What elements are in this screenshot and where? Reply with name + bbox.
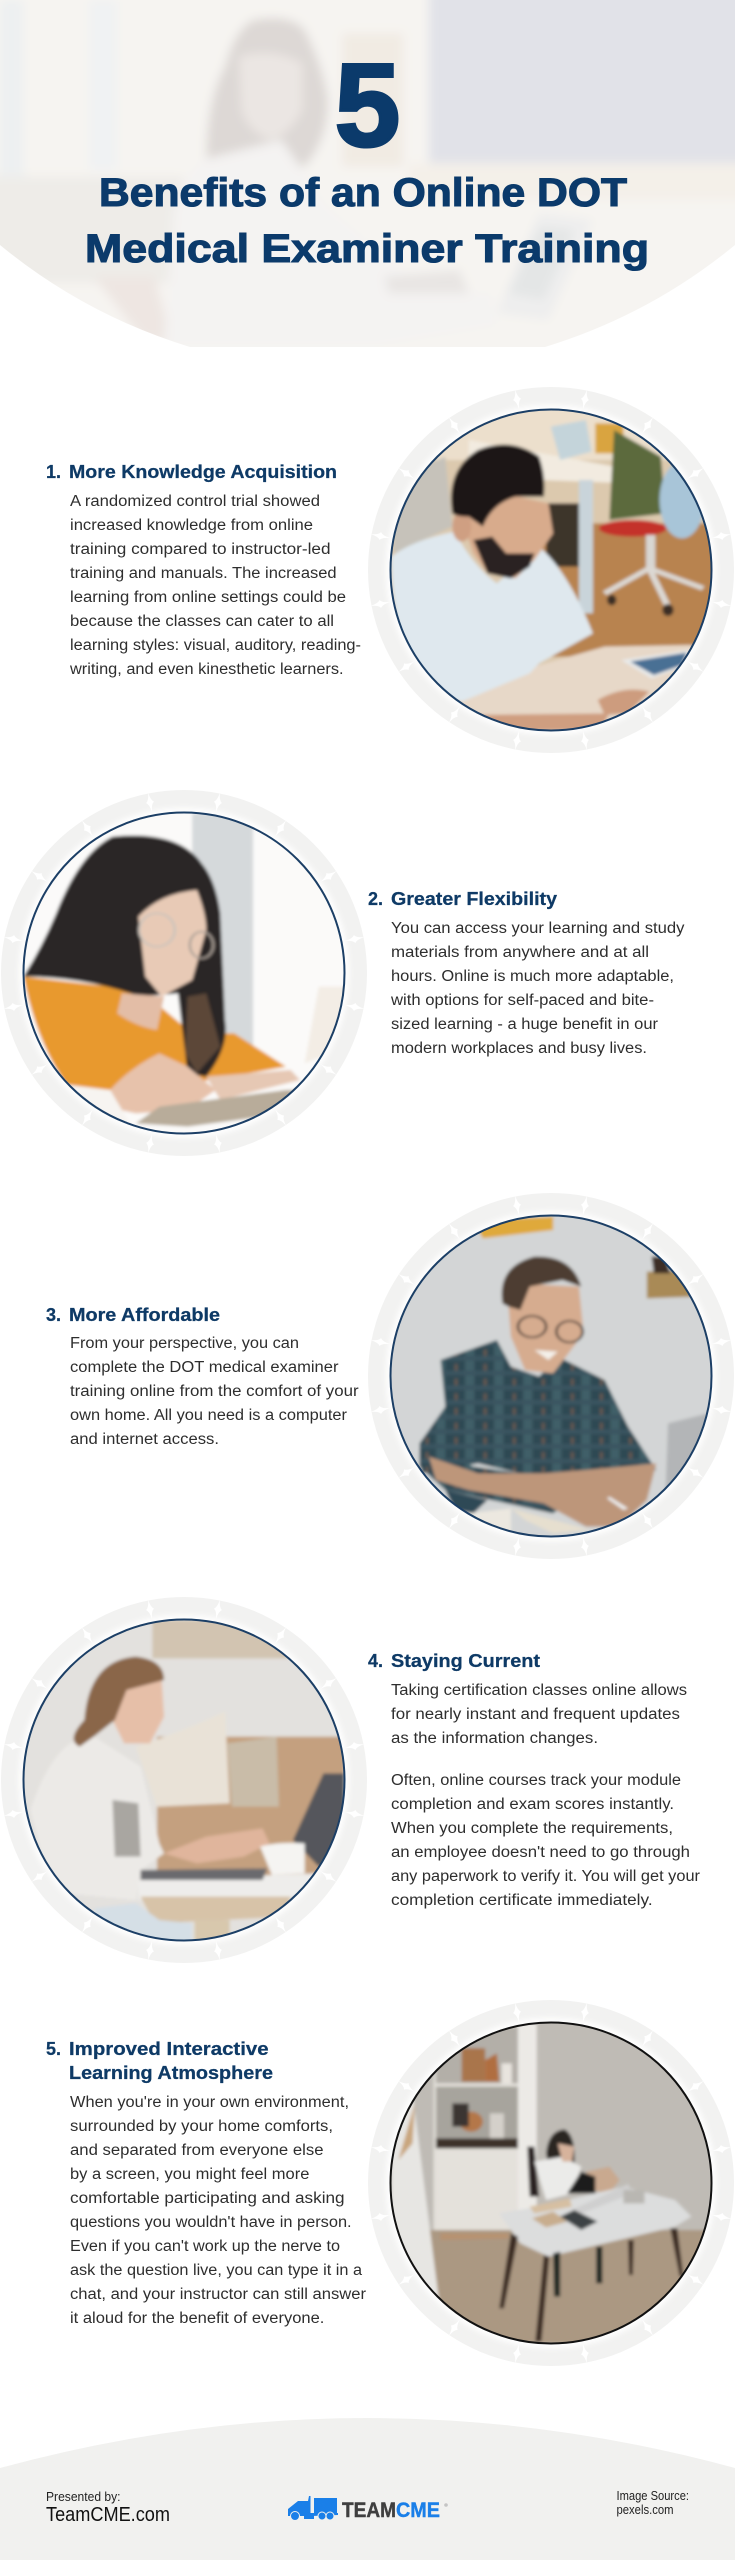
heading: Improved Interactive Learning Atmosphere: Improved Interactive — [69, 2039, 269, 2059]
text block: benefit 5: Even if you can't work up the nerve to — [70, 2238, 340, 2255]
text block: benefit 2: sized learning - a huge benefit in our — [391, 1016, 658, 1033]
circular photo: woman at white table in home — [368, 2000, 734, 2366]
text block: benefit 1: because the classes can cater to all — [70, 613, 334, 630]
heading: Staying Current: 4. — [368, 1651, 383, 1671]
logo wordmark: CME — [396, 2499, 440, 2522]
heading: Improved Interactive Learning Atmosphere: 5. — [46, 2039, 61, 2059]
text block: benefit 3: own home. All you need is a computer — [70, 1407, 347, 1424]
text block: benefit 4 — [391, 1682, 700, 1909]
footer panel — [0, 2418, 735, 2560]
text block: benefit 4: as the information changes. — [391, 1730, 598, 1747]
heading: Greater Flexibility: 2. — [368, 889, 383, 909]
text block: benefit 3 — [70, 1335, 359, 1448]
text block: benefit 5: questions you wouldn't have in person. — [70, 2214, 352, 2231]
credit: presented by: TeamCME.com — [46, 2504, 170, 2526]
main title: Medical Examiner Training — [85, 227, 649, 271]
panel: benefit 5 — [46, 2000, 734, 2366]
heading: More Knowledge Acquisition: 1. — [46, 462, 61, 482]
text block: benefit 4: any paperwork to verify it. You will get your — [391, 1868, 700, 1885]
icon: truck — [288, 2496, 338, 2520]
text block: benefit 1: training compared to instructor-led — [70, 541, 330, 558]
main title: Benefits of an Online DOT — [99, 171, 627, 215]
text block: benefit 2: You can access your learning and study — [391, 920, 685, 937]
text block: benefit 4: Often, online courses track your module — [391, 1772, 681, 1789]
panel: benefit 3 — [46, 1193, 734, 1559]
text block: benefit 4: for nearly instant and frequent updates — [391, 1706, 680, 1723]
credit: image source: Image Source: — [616, 2488, 689, 2503]
text block: benefit 3: From your perspective, you can — [70, 1335, 299, 1352]
circular photo: man in white shirt at desk — [368, 387, 734, 753]
text block: benefit 4: Taking certification classes online allows — [391, 1682, 687, 1699]
heading: Improved Interactive Learning Atmosphere — [46, 2039, 273, 2083]
text block: benefit 2: materials from anywhere and at all — [391, 944, 649, 961]
text block: benefit 4: completion certificate immediately. — [391, 1892, 653, 1909]
text block: benefit 1: learning from online settings could be — [70, 589, 346, 606]
text block: benefit 1: A randomized control trial showed — [70, 493, 320, 510]
credit: image source — [616, 2488, 689, 2517]
heading: More Knowledge Acquisition: More Knowledge Acquisition — [69, 462, 337, 482]
text block: benefit 4: When you complete the requirements, — [391, 1820, 673, 1837]
text block: benefit 5 — [70, 2094, 366, 2327]
main title — [85, 171, 649, 271]
text block: benefit 5: it aloud for the benefit of everyone. — [70, 2310, 324, 2327]
heading: Staying Current: Staying Current — [391, 1651, 540, 1671]
text block: benefit 1: writing, and even kinesthetic learners. — [69, 661, 344, 678]
text block: benefit 3: complete the DOT medical examiner — [70, 1359, 338, 1376]
text block: benefit 5: ask the question live, you can type it in a — [70, 2262, 362, 2279]
logo: TeamCME truck — [288, 2496, 448, 2522]
panel: benefit 2 — [1, 790, 685, 1156]
text block: benefit 5: When you're in your own environment, — [70, 2094, 349, 2111]
heading: More Affordable: 3. — [46, 1305, 61, 1325]
heading: More Affordable: More Affordable — [69, 1305, 220, 1325]
text block: benefit 5: and separated from everyone else — [70, 2142, 324, 2159]
text block: benefit 1 — [69, 493, 361, 678]
text block: benefit 2: with options for self-paced and bite- — [390, 992, 654, 1009]
text block: benefit 4: an employee doesn't need to go through — [391, 1844, 690, 1861]
header panel — [0, 0, 735, 357]
heading: Greater Flexibility: Greater Flexibility — [391, 889, 557, 909]
heading: Improved Interactive Learning Atmosphere: Learning Atmosphere — [69, 2063, 273, 2083]
credit: presented by: Presented by: — [46, 2489, 120, 2504]
panel: benefit 1 — [46, 387, 734, 753]
text block: benefit 1: increased knowledge from online — [70, 517, 313, 534]
text block: benefit 5: comfortable participating and asking — [70, 2190, 345, 2207]
panel: benefit 4 — [1, 1597, 700, 1963]
circular photo: woman with glasses reading — [1, 790, 367, 1156]
circular photo: smiling man in plaid shirt — [368, 1193, 734, 1559]
big number 5: 5 — [335, 40, 400, 172]
text block: benefit 4: completion and exam scores instantly. — [391, 1796, 674, 1813]
text block: benefit 1: training and manuals. The increased — [70, 565, 337, 582]
logo wordmark: TEAM — [342, 2499, 396, 2522]
text block: benefit 5: chat, and your instructor can still answer — [70, 2286, 366, 2303]
text block: benefit 3: training online from the comfort of your — [70, 1383, 359, 1400]
circular photo: woman on sofa with laptop — [1, 1597, 367, 1963]
text block: benefit 2 — [390, 920, 685, 1057]
text block: benefit 5: surrounded by your home comforts, — [70, 2118, 333, 2135]
header photo: faded woman at laptop — [0, 0, 735, 357]
text block: benefit 2: modern workplaces and busy lives. — [391, 1040, 647, 1057]
text block: benefit 3: and internet access. — [70, 1431, 219, 1448]
text block: benefit 1: learning styles: visual, auditory, reading- — [70, 637, 361, 654]
text block: benefit 2: hours. Online is much more adaptable, — [391, 968, 674, 985]
credit: presented by — [46, 2489, 170, 2526]
text block: benefit 5: by a screen, you might feel more — [70, 2166, 309, 2183]
credit: image source: pexels.com — [616, 2502, 674, 2517]
